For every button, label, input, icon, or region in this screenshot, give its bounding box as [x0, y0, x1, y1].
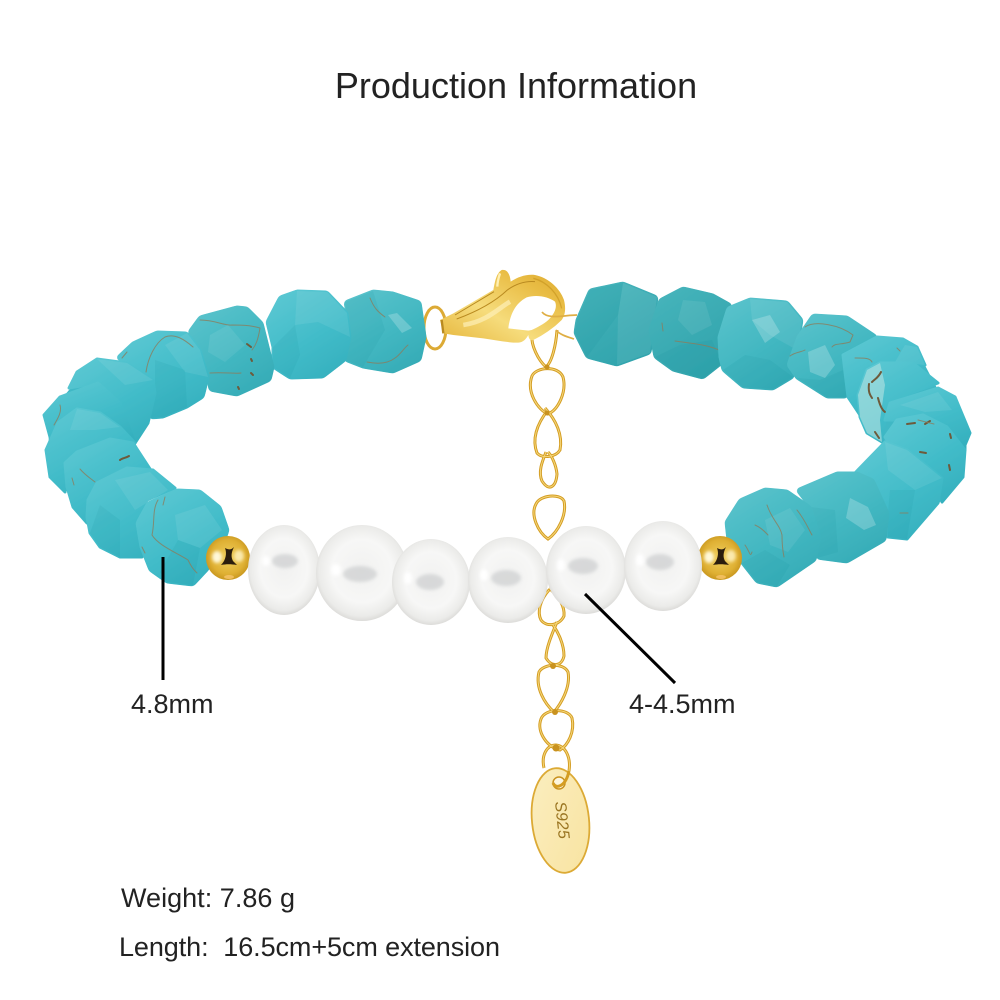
lobster clasp	[424, 270, 577, 349]
bead: right 5	[843, 337, 925, 415]
spacer bead: right gold	[698, 536, 742, 580]
bead: left 6	[44, 383, 135, 443]
callout line: pearl size	[585, 594, 675, 683]
callout line: bead size	[162, 557, 164, 680]
bead: top left 2	[267, 291, 350, 378]
label: bead size: 4.8mm	[131, 689, 214, 719]
spacer bead: left gold	[206, 536, 250, 580]
bead: left 10	[137, 490, 228, 585]
bead: top right 2	[650, 288, 731, 378]
bead: right 6	[858, 363, 938, 442]
bead: top right 3	[719, 299, 802, 389]
bead: right 9	[855, 442, 942, 539]
length: Length: 16.5cm+5cm extension	[119, 932, 500, 962]
bead: right 10	[797, 473, 888, 562]
bead: left 9	[87, 468, 175, 557]
pearl 3	[392, 539, 470, 625]
bead: right 7	[885, 388, 970, 450]
bead: left 8	[65, 439, 150, 523]
bead: top left 3	[189, 307, 273, 395]
extension chain	[530, 330, 573, 771]
bead: left 7	[46, 409, 135, 492]
pearl 2	[316, 525, 408, 621]
pearl 5	[546, 526, 626, 614]
jump ring	[542, 312, 577, 339]
backing: left cluster	[48, 362, 170, 554]
S925 tag	[527, 765, 594, 876]
label: pearl size: 4-4.5mm	[629, 689, 736, 719]
pearl 6	[624, 521, 702, 611]
weight: Weight: 7.86 g	[121, 883, 295, 913]
bead: top left 4	[117, 332, 208, 418]
pearl 4	[468, 537, 548, 623]
bracelet	[44, 270, 970, 876]
clasp ring	[424, 307, 446, 349]
pearl 1	[248, 525, 320, 615]
backing: right cluster	[850, 340, 967, 536]
bead: top right 4	[788, 315, 877, 397]
bead: right 11	[726, 489, 820, 586]
tag text: S925	[551, 801, 572, 840]
bead: left 5	[69, 359, 155, 443]
bead: top right 1	[575, 283, 657, 365]
title: Production Information	[335, 65, 697, 106]
bead: right 8	[885, 415, 965, 502]
bead: top left 1	[345, 291, 425, 372]
